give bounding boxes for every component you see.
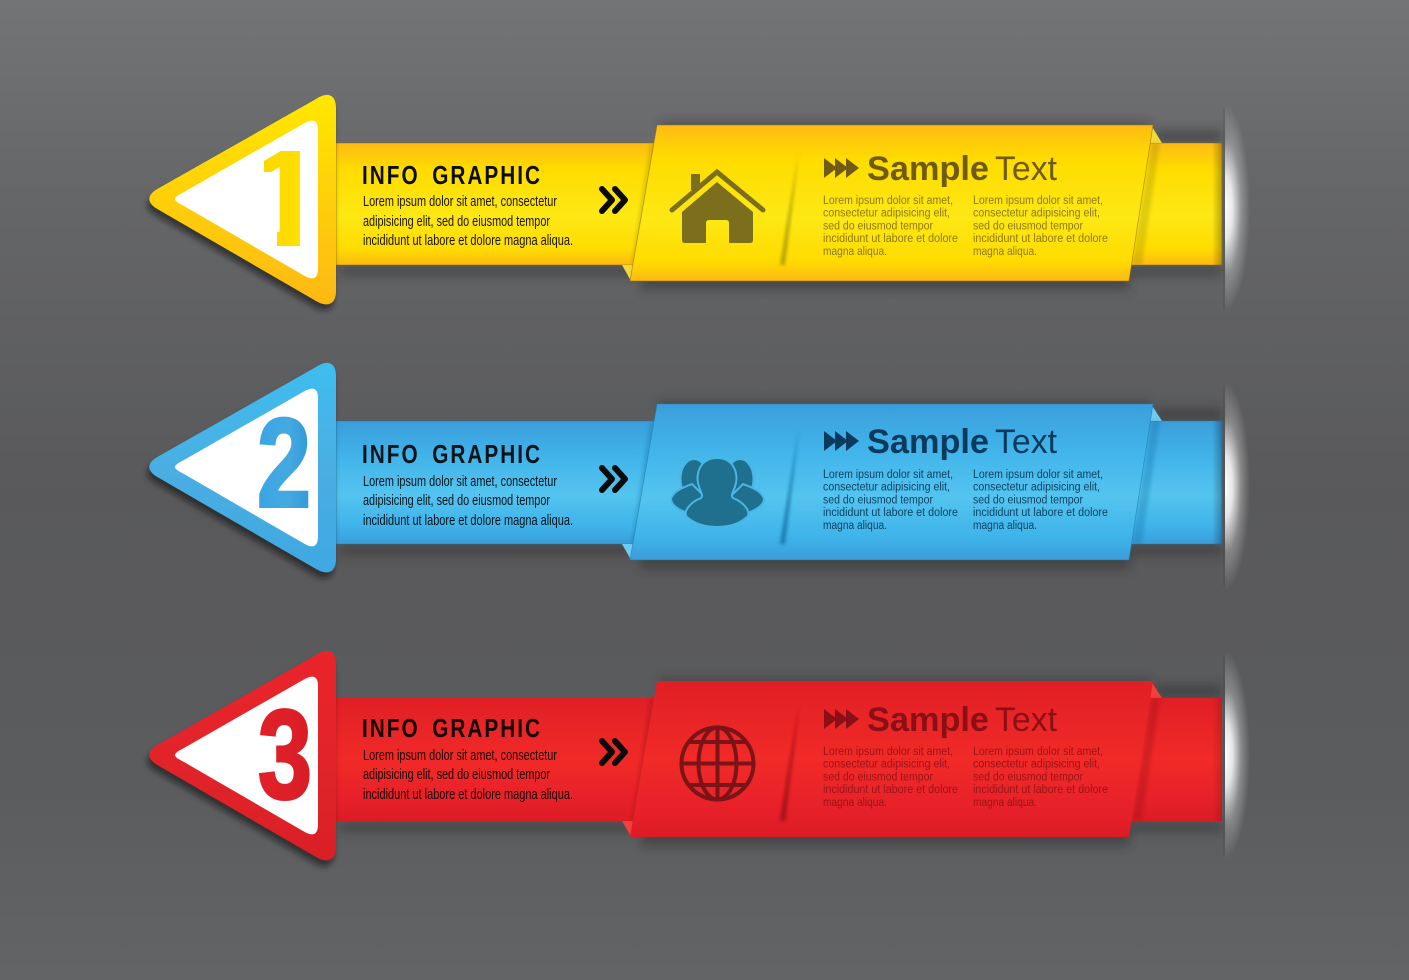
icon: triple arrows [824, 431, 859, 451]
heading: INFO GRAPHIC: INFO GRAPHIC [362, 160, 542, 190]
heading: INFO GRAPHIC: INFO GRAPHIC [362, 439, 542, 469]
arrowhead 3 [147, 651, 336, 866]
text block: column 2: sed do eiusmod tempor [973, 494, 1083, 506]
text block: column 1: sed do eiusmod tempor [823, 772, 933, 784]
text block: intro: adipisicing elit, sed do eiusmod tempor [363, 766, 550, 783]
text block: column 1: magna aliqua. [823, 246, 887, 258]
text block: intro: Lorem ipsum dolor sit amet, consectetur [363, 747, 557, 764]
text block: intro: Lorem ipsum dolor sit amet, consectetur [363, 193, 557, 210]
icon: globe [681, 727, 754, 800]
text block: column 1: consectetur adipisicing elit, [823, 208, 950, 220]
row 2: blue ribbon [147, 363, 1222, 578]
text block: column 1: magna aliqua. [823, 797, 887, 809]
text block: intro: Lorem ipsum dolor sit amet, consectetur [363, 473, 557, 490]
number 2: 2 [257, 392, 311, 534]
icon: double chevron [602, 189, 625, 211]
text block: column 2: incididunt ut labore et dolore [973, 233, 1108, 245]
ribbon end shading [1212, 421, 1222, 544]
ribbon end shading [1212, 143, 1222, 265]
heading: Sample Text: Text [995, 701, 1058, 739]
text block: intro: incididunt ut labore et dolore magna aliqua. [363, 232, 573, 249]
arrowhead 2 [147, 363, 336, 578]
text block: column 1: Lorem ipsum dolor sit amet, [823, 746, 953, 758]
text block: column 1: consectetur adipisicing elit, [823, 758, 950, 770]
icon: double chevron [602, 741, 625, 763]
text block: intro [363, 747, 573, 803]
number 3: 3 [258, 684, 312, 825]
text block: column 1: incididunt ut labore et dolore [823, 784, 958, 796]
wall slit highlights [1224, 108, 1248, 856]
text block: column 2 [973, 746, 1108, 809]
ribbon end shading [1212, 698, 1222, 821]
text block: column 1 [823, 195, 958, 258]
ribbon shadow [340, 122, 1222, 290]
text block: column 2: incididunt ut labore et dolore [973, 784, 1108, 796]
text block: column 1: incididunt ut labore et dolore [823, 233, 958, 245]
text block: column 2: magna aliqua. [973, 797, 1037, 809]
ribbon band [336, 143, 1222, 265]
text block: column 2: Lorem ipsum dolor sit amet, [973, 746, 1103, 758]
row 3: red ribbon [147, 651, 1222, 866]
arrowhead 1 [147, 95, 336, 310]
text block: column 1 [823, 746, 958, 809]
heading: Sample Text: Text [995, 423, 1058, 461]
icon: triple arrows [824, 158, 859, 178]
text block: column 2: sed do eiusmod tempor [973, 772, 1083, 784]
heading: Sample Text: Sample [867, 423, 989, 461]
text block: column 2 [973, 469, 1108, 532]
heading: Sample Text [867, 423, 1058, 461]
text block: column 2 [973, 195, 1108, 258]
text block: column 1: sed do eiusmod tempor [823, 220, 933, 232]
ribbon shadow [340, 401, 1222, 569]
text block: column 1: Lorem ipsum dolor sit amet, [823, 469, 953, 481]
text block: column 2: Lorem ipsum dolor sit amet, [973, 195, 1103, 207]
text block: intro: incididunt ut labore et dolore magna aliqua. [363, 786, 573, 803]
icon: house [672, 172, 763, 243]
text block: intro [363, 193, 573, 249]
ribbon band [336, 421, 1222, 544]
text block: column 2: consectetur adipisicing elit, [973, 482, 1100, 494]
text block: intro: adipisicing elit, sed do eiusmod tempor [363, 213, 550, 230]
text block: column 2: consectetur adipisicing elit, [973, 758, 1100, 770]
heading: Sample Text [867, 701, 1058, 739]
text block: intro [363, 473, 573, 529]
ribbon shadow [340, 678, 1222, 846]
text block: column 1: Lorem ipsum dolor sit amet, [823, 195, 953, 207]
text block: column 2: sed do eiusmod tempor [973, 220, 1083, 232]
text block: column 1: sed do eiusmod tempor [823, 494, 933, 506]
text block: column 2: incididunt ut labore et dolore [973, 507, 1108, 519]
heading: Sample Text: Sample [867, 701, 989, 739]
text block: intro: adipisicing elit, sed do eiusmod tempor [363, 492, 550, 509]
heading: Sample Text: Text [995, 150, 1058, 188]
folded panel [622, 681, 1162, 837]
heading: Sample Text [867, 150, 1058, 188]
text block: column 2: magna aliqua. [973, 246, 1037, 258]
text block: column 1: consectetur adipisicing elit, [823, 482, 950, 494]
row 1: yellow ribbon [147, 95, 1222, 310]
heading: INFO GRAPHIC: INFO GRAPHIC [362, 713, 542, 743]
icon: double chevron [602, 468, 625, 490]
folded panel [622, 404, 1162, 560]
ribbon band [336, 698, 1222, 821]
text block: column 1 [823, 469, 958, 532]
text block: intro: incididunt ut labore et dolore magna aliqua. [363, 512, 573, 529]
text block: column 2: magna aliqua. [973, 520, 1037, 532]
heading: Sample Text: Sample [867, 150, 989, 188]
folded panel [622, 125, 1162, 281]
text block: column 2: consectetur adipisicing elit, [973, 208, 1100, 220]
text block: column 2: Lorem ipsum dolor sit amet, [973, 469, 1103, 481]
text block: column 1: incididunt ut labore et dolore [823, 507, 958, 519]
text block: column 1: magna aliqua. [823, 520, 887, 532]
icon: triple arrows [824, 709, 859, 729]
number 1: 1 [244, 122, 329, 276]
icon: people group [671, 458, 764, 527]
